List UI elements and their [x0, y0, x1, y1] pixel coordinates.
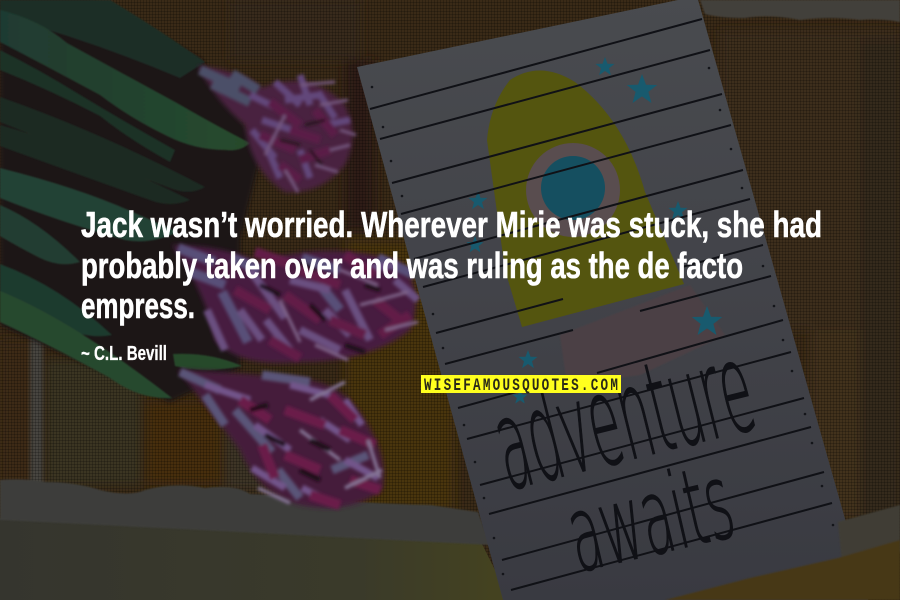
background: floor cloth bottom [0, 518, 510, 600]
note card [357, 0, 868, 600]
illustration: stars [466, 57, 722, 403]
watermark banner: WISEFAMOUSQUOTES.COM [424, 375, 618, 396]
background: tan cloth over card corner [665, 540, 900, 600]
card punch dots [371, 67, 834, 575]
background: lace trim bottom [0, 479, 490, 545]
illustration: rocket [487, 70, 725, 385]
quote text: empress. [81, 285, 195, 326]
quote text [81, 204, 822, 326]
flower cluster: middle [172, 245, 418, 363]
flower cluster: bottom [178, 370, 384, 508]
background: lace trim lower right [838, 505, 900, 562]
card ruled lines [370, 19, 832, 590]
leaves [0, 0, 262, 402]
background: lace trim top right [700, 0, 900, 22]
flower cluster: top [198, 66, 356, 192]
card sheet [357, 0, 868, 600]
author: ~ C.L. Bevill [81, 343, 167, 365]
